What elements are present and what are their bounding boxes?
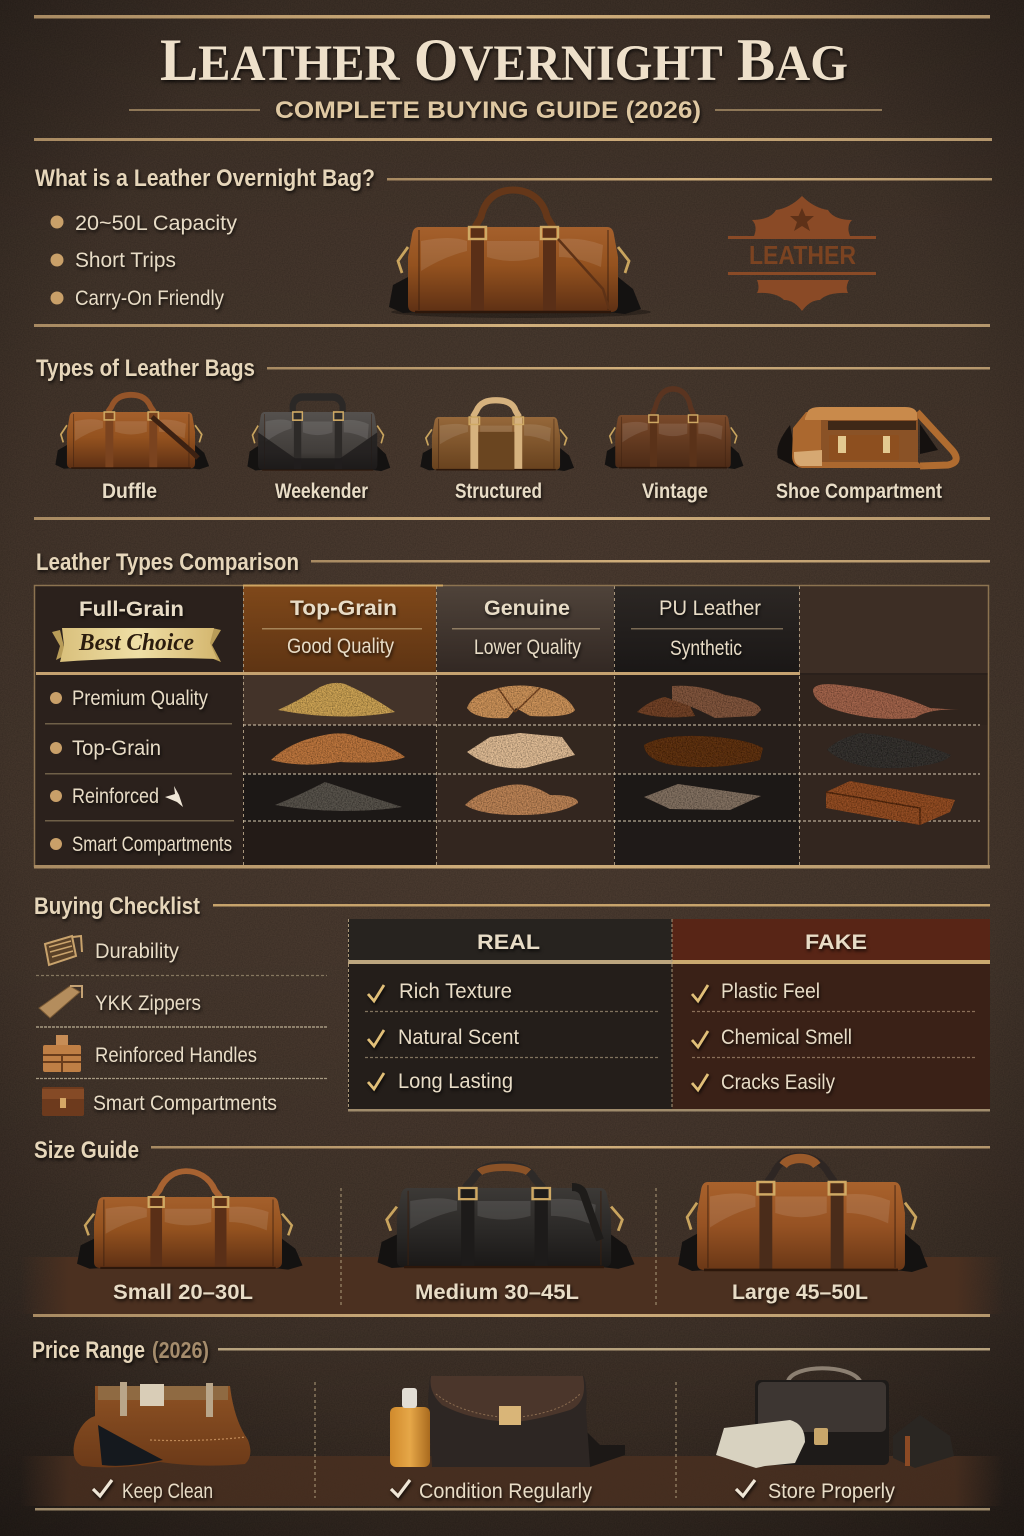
size: large bbox=[678, 1156, 928, 1304]
bullet list bbox=[50, 212, 238, 310]
panel: price range bbox=[20, 1337, 1004, 1510]
panel: types of leather bags bbox=[34, 355, 990, 520]
heading: types: Types of Leather Bags bbox=[36, 355, 255, 382]
care: keep clean: Keep Clean bbox=[122, 1480, 213, 1503]
heading: checklist: Buying Checklist bbox=[34, 893, 200, 920]
column header: top-grain: Top-Grain bbox=[290, 597, 397, 620]
heading: size guide: Size Guide bbox=[34, 1137, 139, 1164]
checklist item: ykk zippers bbox=[39, 986, 201, 1018]
column: real: Natural Scent bbox=[398, 1026, 519, 1049]
column header: full-grain: Full-Grain bbox=[79, 598, 184, 621]
column: real: Long Lasting bbox=[398, 1070, 513, 1093]
column: real: REAL bbox=[477, 931, 540, 954]
heading: price range: Price Range bbox=[32, 1337, 145, 1364]
checklist item: ykk zippers: YKK Zippers bbox=[95, 992, 201, 1015]
row labels bbox=[45, 687, 234, 856]
type: vintage: Vintage bbox=[642, 480, 708, 503]
table: real vs fake bbox=[348, 919, 990, 1112]
type: duffle: Duffle bbox=[102, 480, 157, 503]
size: medium bbox=[378, 1165, 635, 1304]
column header: pu leather: PU Leather bbox=[659, 597, 761, 620]
row labels: Smart Compartments bbox=[72, 833, 232, 856]
type: weekender: Weekender bbox=[275, 480, 368, 503]
leather swatches bbox=[271, 683, 960, 825]
column header: pu leather: Synthetic bbox=[670, 637, 742, 660]
column header: top-grain bbox=[262, 597, 422, 658]
care: store properly bbox=[716, 1368, 954, 1503]
bullet list: Short Trips bbox=[75, 249, 176, 272]
row labels: Top-Grain bbox=[72, 737, 161, 760]
comparison table bbox=[34, 584, 990, 868]
checklist item: reinforced handles: Reinforced Handles bbox=[95, 1044, 257, 1067]
heading: price range: (2026) bbox=[152, 1337, 209, 1363]
column: real bbox=[348, 919, 672, 1110]
image: hero duffle bag bbox=[389, 190, 651, 318]
heading: what is: What is a Leather Overnight Bag? bbox=[35, 165, 375, 192]
panel: leather types comparison bbox=[34, 549, 990, 868]
type: weekender bbox=[247, 397, 390, 503]
column: fake: Chemical Smell bbox=[721, 1026, 852, 1049]
panel: size guide bbox=[20, 1137, 1004, 1317]
ribbon: best choice: Best Choice bbox=[78, 630, 194, 656]
column: fake bbox=[672, 919, 990, 1110]
table column backgrounds bbox=[35, 586, 989, 866]
checklist item: smart compartments: Smart Compartments bbox=[93, 1092, 277, 1115]
panel: what is a leather overnight bag bbox=[34, 165, 992, 327]
checklist item: durability bbox=[45, 936, 179, 965]
column: fake: Cracks Easily bbox=[721, 1071, 835, 1094]
column: fake: Plastic Feel bbox=[721, 980, 820, 1003]
column header: genuine bbox=[452, 597, 600, 659]
row labels: Premium Quality bbox=[72, 687, 208, 710]
heading: comparison: Leather Types Comparison bbox=[36, 549, 299, 576]
size: medium: Medium 30–45L bbox=[415, 1281, 579, 1304]
column header: top-grain: Good Quality bbox=[287, 635, 394, 658]
title block bbox=[34, 15, 992, 141]
care: store properly: Store Properly bbox=[768, 1480, 895, 1503]
size: small: Small 20–30L bbox=[113, 1281, 253, 1304]
checklist item: reinforced handles bbox=[43, 1035, 257, 1072]
care: condition regularly: Condition Regularly bbox=[419, 1480, 592, 1503]
care: keep clean bbox=[74, 1382, 250, 1503]
type: structured: Structured bbox=[455, 480, 542, 503]
type: shoe compartment: Shoe Compartment bbox=[776, 480, 942, 503]
row labels: Reinforced bbox=[72, 785, 159, 808]
care: condition regularly bbox=[390, 1376, 625, 1503]
panel: buying checklist bbox=[34, 893, 990, 1116]
checklist item: durability: Durability bbox=[95, 940, 179, 963]
icon: leather badge bbox=[728, 196, 876, 311]
subtitle: COMPLETE BUYING GUIDE (2026) bbox=[275, 97, 701, 124]
bullet list: Carry-On Friendly bbox=[75, 287, 224, 310]
icon: leather badge: LEATHER bbox=[749, 240, 856, 270]
column header: genuine: Genuine bbox=[484, 597, 570, 620]
size: small bbox=[77, 1171, 303, 1304]
column header: genuine: Lower Quality bbox=[474, 636, 581, 659]
column: real: Rich Texture bbox=[399, 980, 512, 1003]
column header: full-grain bbox=[52, 598, 221, 662]
checklist item: smart compartments bbox=[42, 1087, 277, 1116]
type: vintage bbox=[605, 389, 743, 503]
type: shoe compartment bbox=[776, 407, 956, 503]
title: LEATHER OVERNIGHT BAG bbox=[160, 27, 848, 93]
ribbon: best choice bbox=[52, 628, 221, 662]
column: fake: FAKE bbox=[805, 931, 867, 954]
bullet list: 20~50L Capacity bbox=[75, 212, 238, 235]
type: duffle bbox=[55, 395, 209, 503]
column header: pu leather bbox=[631, 597, 783, 660]
size: large: Large 45–50L bbox=[732, 1281, 868, 1304]
type: structured bbox=[420, 400, 574, 503]
heading: price range bbox=[32, 1337, 990, 1364]
